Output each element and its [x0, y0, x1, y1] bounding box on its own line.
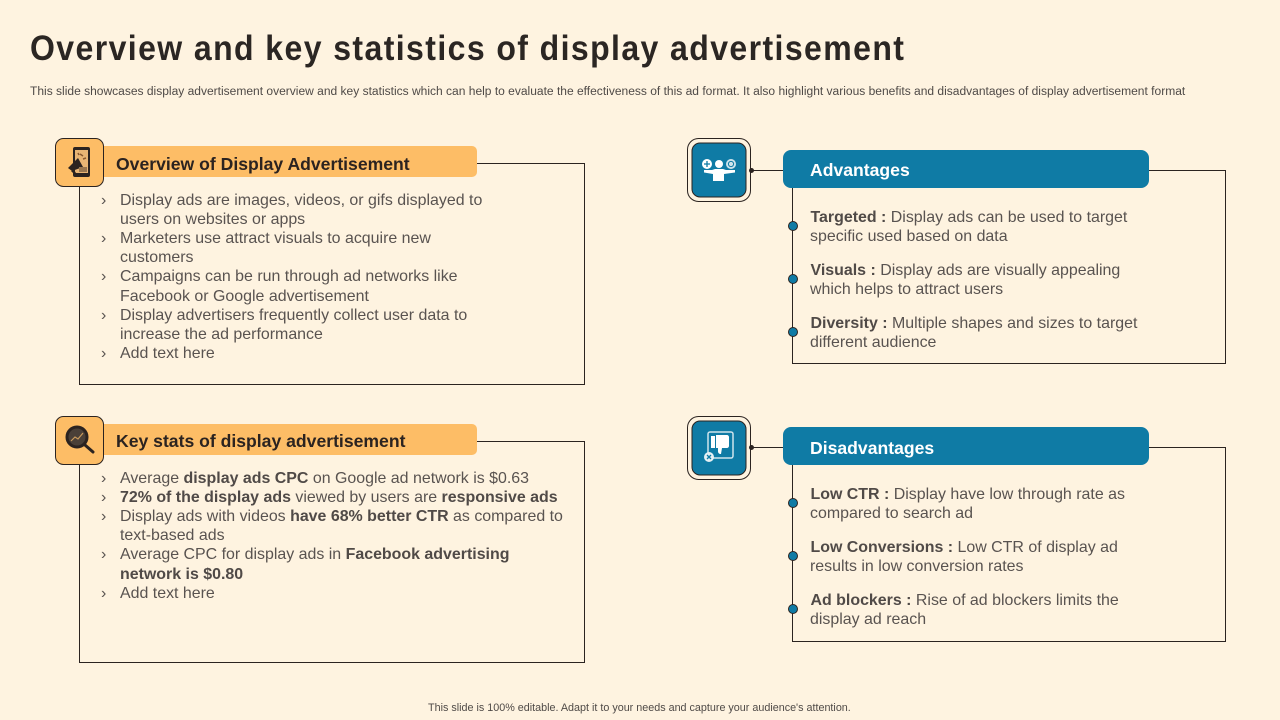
overview bullet list: › [101, 345, 106, 362]
advantages bullets: which helps to attract users [810, 281, 1003, 298]
heading: Disadvantages [810, 438, 934, 458]
overview bullet list: Display advertisers frequently collect user data to [120, 307, 467, 324]
heading bar [95, 424, 477, 455]
connector dot [749, 168, 754, 173]
disadvantages bullets [788, 486, 1125, 628]
key stats bullet list: › [101, 585, 106, 602]
overview bullet list [101, 192, 482, 362]
overview bullet list: › [101, 307, 106, 324]
overview bullet list: Marketers use attract visuals to acquire new [120, 230, 431, 247]
overview bullet list: users on websites or apps [120, 211, 305, 228]
key stats bullet list: › [101, 489, 106, 506]
disadvantages bullets: Low CTR : Display have low through rate as [810, 486, 1125, 503]
subtitle text: This slide showcases display advertisement overview and key statistics which can help to evaluate the effectiveness of this ad format. It also highlight various benefits and disadvantages of display advertisement format [30, 84, 1185, 98]
heading bar [95, 146, 477, 177]
overview bullet list: customers [120, 249, 194, 266]
advantages bullets: specific used based on data [810, 228, 1008, 245]
overview bullet list: › [101, 268, 106, 285]
heading: Advantages [810, 160, 910, 180]
key stats bullet list: network is $0.80 [120, 566, 243, 583]
bullet marker [788, 274, 798, 284]
icon: person weighing pros and cons [687, 138, 751, 202]
icon: magnifier with chart [55, 416, 104, 465]
title: Overview and key statistics of display advertisement [30, 28, 905, 68]
overview bullet list: Campaigns can be run through ad networks like [120, 268, 458, 285]
key stats bullet list: Average CPC for display ads in Facebook advertising [120, 546, 509, 563]
bullet marker [788, 327, 798, 337]
disadvantages bullets: display ad reach [810, 611, 926, 628]
overview bullet list: Display ads are images, videos, or gifs displayed to [120, 192, 482, 209]
disadvantages bullets: results in low conversion rates [810, 558, 1023, 575]
key stats bullet list: › [101, 508, 106, 525]
connector line [751, 170, 785, 171]
overview bullet list: › [101, 230, 106, 247]
disadvantages bullets: Ad blockers : Rise of ad blockers limits the [810, 592, 1119, 609]
overview bullet list: › [101, 192, 106, 209]
key stats bullet list: text-based ads [120, 527, 225, 544]
panel outline [79, 163, 585, 385]
overview bullet list: Add text here [120, 345, 215, 362]
overview bullet list: Facebook or Google advertisement [120, 288, 369, 305]
disadvantages bullets: Low Conversions : Low CTR of display ad [810, 539, 1118, 556]
icon: thumbs down [687, 416, 751, 480]
heading bar [783, 150, 1149, 188]
connector line [751, 447, 785, 448]
advantages bullets [788, 209, 1138, 351]
advantages bullets: Visuals : Display ads are visually appealing [810, 262, 1120, 279]
key stats bullet list: Add text here [120, 585, 215, 602]
heading: Key stats of display advertisement [116, 431, 405, 451]
disadvantages bullets: compared to search ad [810, 505, 973, 522]
panel outline [79, 441, 585, 663]
heading bar [783, 427, 1149, 465]
heading: Overview of Display Advertisement [116, 154, 410, 174]
icon: phone with megaphone [55, 138, 104, 187]
key stats bullet list [101, 470, 563, 602]
advantages bullets: different audience [810, 334, 936, 351]
footer note: This slide is 100% editable. Adapt it to your needs and capture your audience's attention. [428, 702, 851, 714]
overview bullet list: increase the ad performance [120, 326, 323, 343]
panel outline [792, 170, 1226, 364]
key stats bullet list: › [101, 546, 106, 563]
panel outline [792, 447, 1226, 642]
key stats bullet list: Average display ads CPC on Google ad network is $0.63 [120, 470, 529, 487]
connector dot [749, 445, 754, 450]
panel: disadvantages [687, 416, 1226, 642]
key stats bullet list: Display ads with videos have 68% better CTR as compared to [120, 508, 563, 525]
key stats bullet list: › [101, 470, 106, 487]
key stats bullet list: 72% of the display ads viewed by users are responsive ads [120, 489, 558, 506]
bullet marker [788, 221, 798, 231]
bullet marker [788, 498, 798, 508]
panel: advantages [687, 138, 1226, 364]
bullet marker [788, 604, 798, 614]
panel: key stats of display advertisement [55, 416, 585, 663]
advantages bullets: Diversity : Multiple shapes and sizes to target [810, 315, 1137, 332]
panel: overview of display advertisement [55, 138, 585, 385]
advantages bullets: Targeted : Display ads can be used to target [810, 209, 1127, 226]
bullet marker [788, 551, 798, 561]
